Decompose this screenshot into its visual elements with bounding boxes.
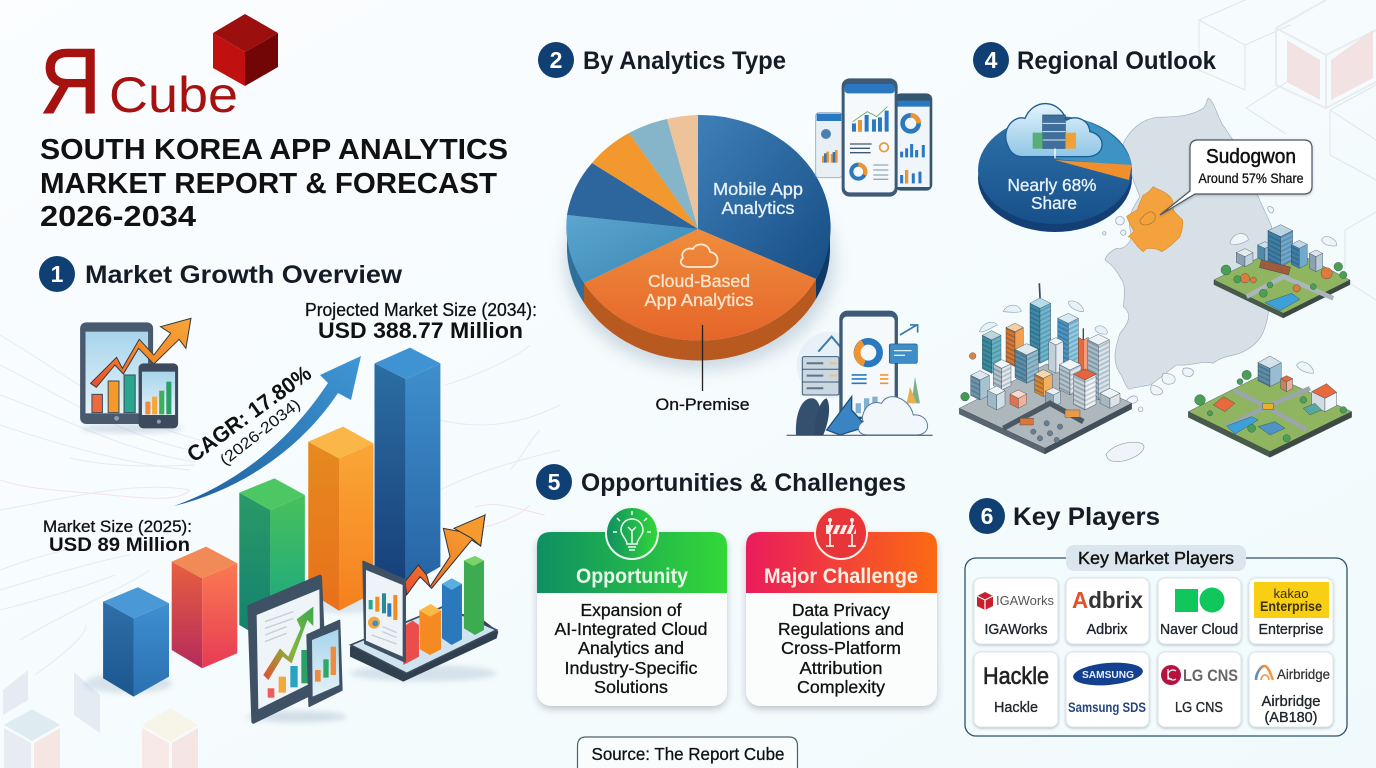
card: Samsung SDS: Samsung SDS	[1068, 700, 1146, 715]
label: mobile app analytics: Analytics	[722, 198, 795, 218]
card: Enterprise: Enterprise	[1260, 599, 1322, 614]
label: projected market size: Projected Market Size (2034):	[305, 300, 537, 320]
card: Enterprise: kakao	[1274, 586, 1308, 601]
card: Hackle	[974, 652, 1058, 727]
icon: tablet and phone analytics	[247, 577, 347, 723]
heading: market growth overview	[39, 256, 403, 292]
callout: Sudogwon: Sudogwon	[1206, 146, 1296, 168]
card: Naver Cloud: Naver Cloud	[1160, 622, 1238, 638]
arrow: CAGR growth	[174, 356, 361, 506]
label: market size 2025	[43, 517, 192, 556]
icon: cloud outline	[681, 244, 718, 267]
text: opportunity description: Solutions	[594, 677, 668, 697]
illustration: large city	[959, 283, 1132, 454]
text: challenge description: Complexity	[797, 677, 885, 697]
label: key market players: Key Market Players	[1078, 548, 1234, 568]
icon: laptop with 3D bars and arrow	[350, 515, 498, 682]
text: challenge description: Data Privacy	[792, 600, 890, 620]
card: Adbrix	[1066, 578, 1149, 644]
card: LG CNS	[1158, 652, 1241, 727]
icon: barrier	[815, 507, 867, 559]
label: nearly 68% share: Nearly 68%	[1008, 175, 1096, 195]
heading: opportunities and challenges	[536, 464, 906, 500]
title: SOUTH KOREA APP ANALYTICS	[40, 134, 508, 166]
label: projected market size	[305, 300, 537, 343]
label: CAGR: (2026-2034)	[217, 396, 304, 469]
label: market size 2025: USD 89 Million	[49, 535, 190, 556]
card: major challenge: Major Challenge	[764, 564, 918, 588]
logo: Report Cube: Cube	[109, 67, 238, 123]
label: cloud-based app analytics	[644, 271, 754, 310]
card: LG CNS: LG CNS	[1175, 700, 1223, 716]
text: opportunity description: Analytics and	[578, 638, 684, 658]
title: 2026-2034	[40, 201, 196, 233]
panel: key players	[965, 498, 1347, 736]
panel: regional outlook	[959, 42, 1352, 462]
text: challenge description: Cross-Platform	[781, 638, 901, 658]
text: challenge description: Regulations and	[778, 619, 904, 639]
panel: opportunities and challenges	[536, 464, 937, 706]
label: key market players	[1066, 545, 1246, 571]
icon: phones with dashboards	[816, 78, 932, 197]
icon: phone, server and cloud	[787, 311, 933, 435]
heading: by analytics type: 2	[550, 47, 562, 73]
chart: 68% share pie	[978, 104, 1132, 232]
label: nearly 68% share: Share	[1031, 193, 1077, 213]
label: cloud-based app analytics: App Analytics	[644, 290, 754, 310]
card: IGAWorks	[974, 578, 1058, 644]
card: Adbrix: Adbrix	[1072, 587, 1143, 613]
callout: Sudogwon	[1160, 140, 1312, 215]
heading: regional outlook: Regional Outlook	[1017, 47, 1216, 75]
title	[40, 134, 508, 233]
card: Airbridge: Airbridge	[1262, 694, 1320, 710]
text: opportunity description: AI-Integrated Cloud	[554, 619, 708, 639]
label: projected market size: USD 388.77 Million	[318, 318, 523, 343]
label: mobile app analytics	[713, 179, 803, 218]
card: LG CNS: LG CNS	[1183, 666, 1238, 685]
illustration: mid city	[1214, 225, 1350, 318]
heading: by analytics type: By Analytics Type	[583, 47, 786, 75]
panel: by analytics type	[538, 42, 933, 435]
source box	[578, 737, 798, 768]
icon: cloud server	[1006, 104, 1102, 158]
card: Airbridge: (AB180)	[1264, 710, 1318, 726]
card: Adbrix: Adbrix	[1086, 622, 1128, 638]
text: opportunity description: Industry-Specific	[564, 658, 698, 678]
text: opportunity description	[554, 600, 708, 697]
card: Hackle: Hackle	[994, 700, 1038, 716]
text: challenge description	[778, 600, 904, 697]
heading: market growth overview: 1	[51, 261, 64, 287]
heading: key players: Key Players	[1013, 503, 1160, 531]
icon: lightbulb	[606, 507, 658, 559]
icon: tablet and phone with rising chart	[80, 318, 191, 433]
card: opportunity: Opportunity	[576, 564, 688, 588]
callout: on-premise	[656, 325, 750, 414]
card: Samsung SDS: SAMSUNG	[1082, 669, 1134, 681]
card: Enterprise: Enterprise	[1258, 622, 1324, 638]
label: cloud-based app analytics: Cloud-Based	[648, 271, 750, 291]
label: market size 2025: Market Size (2025):	[43, 517, 192, 536]
box: key market players	[965, 545, 1347, 736]
card: Airbridge	[1249, 652, 1333, 727]
label: mobile app analytics: Mobile App	[713, 179, 803, 199]
logo: Report Cube: Я	[40, 31, 101, 133]
heading: key players	[969, 498, 1160, 534]
heading: by analytics type	[538, 42, 786, 78]
card: IGAWorks: IGAWorks	[996, 593, 1054, 608]
heading: regional outlook	[973, 42, 1216, 78]
text: opportunity description: Expansion of	[580, 600, 682, 620]
card: Enterprise	[1249, 578, 1333, 644]
card: opportunity	[537, 507, 727, 706]
logo: Report Cube	[40, 14, 278, 133]
pie chart: analytics type	[565, 115, 835, 370]
region: Sudogwon	[1127, 187, 1183, 252]
illustration: suburb town	[1188, 356, 1352, 457]
text: challenge description: Attribution	[800, 658, 882, 678]
label: nearly 68% share	[1008, 175, 1096, 213]
card: major challenge	[746, 507, 937, 706]
card: Samsung SDS	[1066, 652, 1149, 727]
callout: on-premise: On-Premise	[656, 395, 750, 414]
source box: Source: The Report Cube	[592, 744, 784, 764]
card: Airbridge: Airbridge	[1277, 667, 1330, 682]
title: MARKET REPORT & FORECAST	[40, 168, 497, 200]
label: CAGR: CAGR: 17.80%	[182, 360, 316, 467]
heading: market growth overview: Market Growth Overview	[85, 261, 403, 289]
card: Hackle: Hackle	[983, 663, 1049, 690]
heading: opportunities and challenges: Opportunities & Challenges	[581, 469, 906, 497]
card: Naver Cloud	[1158, 578, 1241, 644]
bar chart: market growth	[84, 348, 440, 697]
heading: regional outlook: 4	[985, 47, 998, 73]
card: IGAWorks: IGAWorks	[984, 622, 1048, 638]
heading: key players: 6	[981, 503, 993, 529]
map: South Korea	[1103, 98, 1273, 462]
heading: opportunities and challenges: 5	[548, 469, 561, 495]
callout: Sudogwon: Around 57% Share	[1198, 171, 1304, 186]
panel: market growth overview	[39, 256, 537, 723]
